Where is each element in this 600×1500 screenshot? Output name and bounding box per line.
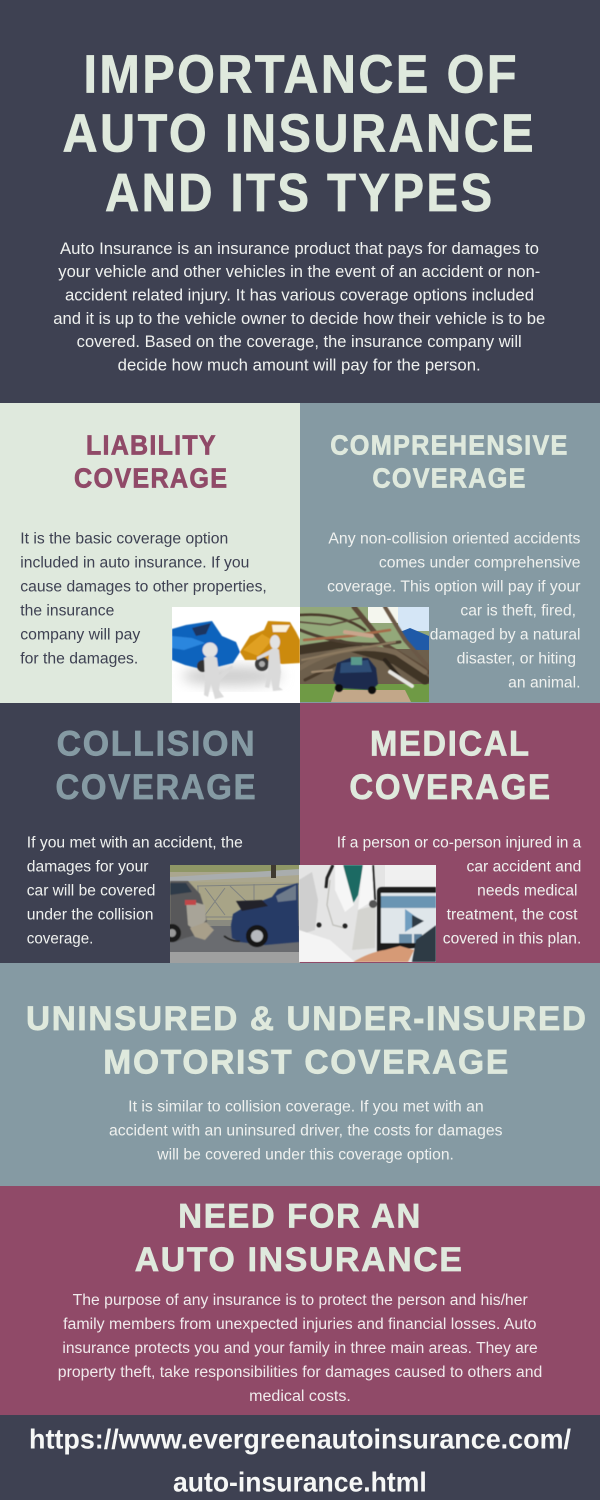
- heading: collision coverage: [56, 724, 257, 807]
- medical text: If a person or co-person injured in a: [337, 835, 582, 852]
- medical text: needs medical: [477, 883, 578, 900]
- intro text: covered. Based on the coverage, the insurance company will: [77, 333, 522, 351]
- panel: website footer: [0, 1415, 600, 1500]
- heading: uninsured motorist coverage: MOTORIST COVERAGE: [103, 1043, 510, 1081]
- comprehensive text: car is theft, fired,: [460, 602, 576, 619]
- heading: collision coverage: COLLISION: [57, 724, 256, 764]
- liability text: included in auto insurance. If you: [20, 554, 249, 571]
- need text: medical costs.: [249, 1388, 351, 1405]
- comprehensive text: coverage. This option will pay if your: [327, 578, 580, 595]
- heading: comprehensive coverage: COMPREHENSIVE: [330, 430, 569, 460]
- panel: header: [0, 0, 600, 403]
- panel: liability coverage: [0, 403, 300, 703]
- comprehensive text: damaged by a natural: [430, 626, 580, 643]
- intro text: decide how much amount will pay for the person.: [118, 357, 481, 375]
- image: doctor holding a tablet: [299, 865, 436, 962]
- liability text: company will pay: [20, 626, 141, 643]
- intro text: accident related injury. It has various coverage options included: [65, 287, 534, 305]
- uninsured text: will be covered under this coverage option.: [156, 1147, 454, 1164]
- panel: collision coverage: [27, 730, 300, 963]
- title: [62, 44, 536, 223]
- collision text: damages for your: [27, 859, 148, 876]
- website url: [29, 1423, 571, 1498]
- panel: medical coverage: [299, 703, 600, 963]
- need text: The purpose of any insurance is to protect the person and his/her: [73, 1292, 528, 1309]
- intro text: your vehicle and other vehicles in the event of an accident or non-: [58, 263, 540, 281]
- heading: uninsured motorist coverage: [26, 1000, 588, 1081]
- heading: need for an auto insurance: [135, 1198, 464, 1279]
- panel: need for an auto insurance: [0, 1186, 600, 1415]
- panel: uninsured and under-insured motorist coverage: [0, 963, 600, 1186]
- website url: https://www.evergreenautoinsurance.com/: [29, 1423, 571, 1454]
- collision text: If you met with an accident, the: [27, 835, 243, 852]
- liability text: cause damages to other properties,: [20, 578, 267, 595]
- comprehensive text: an animal.: [508, 674, 580, 691]
- intro text: and it is up to the vehicle owner to decide how their vehicle is to be: [53, 310, 545, 328]
- liability text: the insurance: [20, 602, 114, 619]
- heading: need for an auto insurance: NEED FOR AN: [178, 1198, 422, 1236]
- intro text: Auto Insurance is an insurance product that pays for damages to: [60, 240, 539, 258]
- intro text: [53, 240, 545, 375]
- heading: comprehensive coverage: COVERAGE: [372, 462, 527, 494]
- panel: comprehensive coverage: [300, 403, 600, 703]
- medical text: car accident and: [466, 859, 581, 876]
- need text: family members from unexpected injuries and financial losses. Auto: [63, 1316, 536, 1333]
- uninsured text: It is similar to collision coverage. If you met with an: [128, 1099, 484, 1116]
- medical text: treatment, the cost: [447, 907, 578, 924]
- heading: uninsured motorist coverage: UNINSURED & UNDER-INSURED: [26, 1000, 588, 1038]
- need text: insurance protects you and your family in three main areas. They are: [62, 1340, 538, 1357]
- heading: medical coverage: COVERAGE: [349, 768, 552, 807]
- uninsured text: accident with an uninsured driver, the costs for damages: [109, 1123, 503, 1140]
- uninsured text: [109, 1099, 503, 1164]
- comprehensive text: Any non-collision oriented accidents: [328, 530, 581, 547]
- collision text: coverage.: [27, 931, 93, 948]
- website url: auto-insurance.html: [173, 1467, 427, 1498]
- heading: medical coverage: [349, 724, 552, 807]
- collision text: [27, 835, 243, 948]
- comprehensive text: [327, 530, 581, 691]
- heading: collision coverage: COVERAGE: [56, 768, 257, 807]
- comprehensive text: disaster, or hiting: [457, 650, 576, 667]
- medical text: [337, 835, 582, 948]
- liability text: It is the basic coverage option: [20, 530, 228, 547]
- liability text: [20, 530, 267, 667]
- heading: liability coverage: LIABILITY: [86, 430, 217, 460]
- collision text: car will be covered: [27, 883, 155, 900]
- title: AUTO INSURANCE: [62, 104, 536, 164]
- need text: [58, 1292, 542, 1405]
- heading: comprehensive coverage: [330, 430, 569, 494]
- comprehensive text: comes under comprehensive: [379, 554, 580, 571]
- image: car crushed under fallen tree: [300, 607, 429, 702]
- collision text: under the collision: [27, 907, 153, 924]
- title: IMPORTANCE OF: [84, 44, 519, 104]
- heading: liability coverage: [74, 430, 228, 494]
- heading: liability coverage: COVERAGE: [74, 462, 228, 494]
- heading: need for an auto insurance: AUTO INSURANCE: [135, 1241, 464, 1279]
- medical text: covered in this plan.: [443, 931, 581, 948]
- image: two figures beside crashed cars: [172, 607, 300, 703]
- title: AND ITS TYPES: [105, 163, 494, 223]
- image: two cars after a collision: [163, 865, 300, 963]
- heading: medical coverage: MEDICAL: [370, 724, 531, 764]
- liability text: for the damages.: [20, 650, 138, 667]
- need text: property theft, take responsibilities for damages caused to others and: [58, 1364, 542, 1381]
